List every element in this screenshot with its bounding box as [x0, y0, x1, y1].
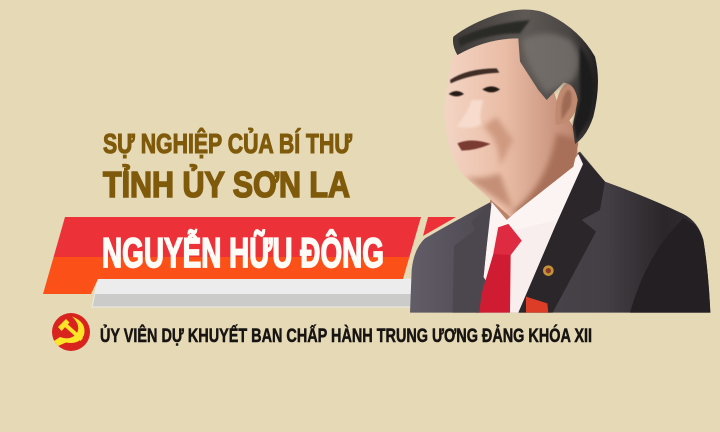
party pin — [543, 265, 554, 276]
portrait photo — [410, 10, 710, 313]
hammer and sickle — [54, 316, 84, 346]
jacket — [410, 152, 710, 313]
hair — [453, 10, 598, 144]
name text: NGUYỄN HỮU ĐÔNG — [102, 228, 384, 276]
nose and cheek shading — [457, 100, 483, 128]
ear — [555, 83, 578, 125]
face — [444, 38, 578, 216]
heading: career of the party secretary: TỈNH ỦY SƠN LA — [103, 163, 350, 205]
left lapel — [453, 202, 491, 313]
party emblem — [52, 313, 90, 351]
name banner — [43, 217, 456, 307]
neck — [490, 143, 578, 222]
heading: career of the party secretary — [103, 127, 353, 205]
necktie — [476, 224, 522, 313]
right lapel — [518, 152, 605, 313]
heading: career of the party secretary: SỰ NGHIỆP CỦA BÍ THƯ — [103, 127, 353, 159]
eyebrows and eyes — [449, 68, 500, 96]
mouth — [457, 140, 491, 151]
delegate badge — [526, 297, 548, 313]
shirt — [483, 154, 583, 313]
